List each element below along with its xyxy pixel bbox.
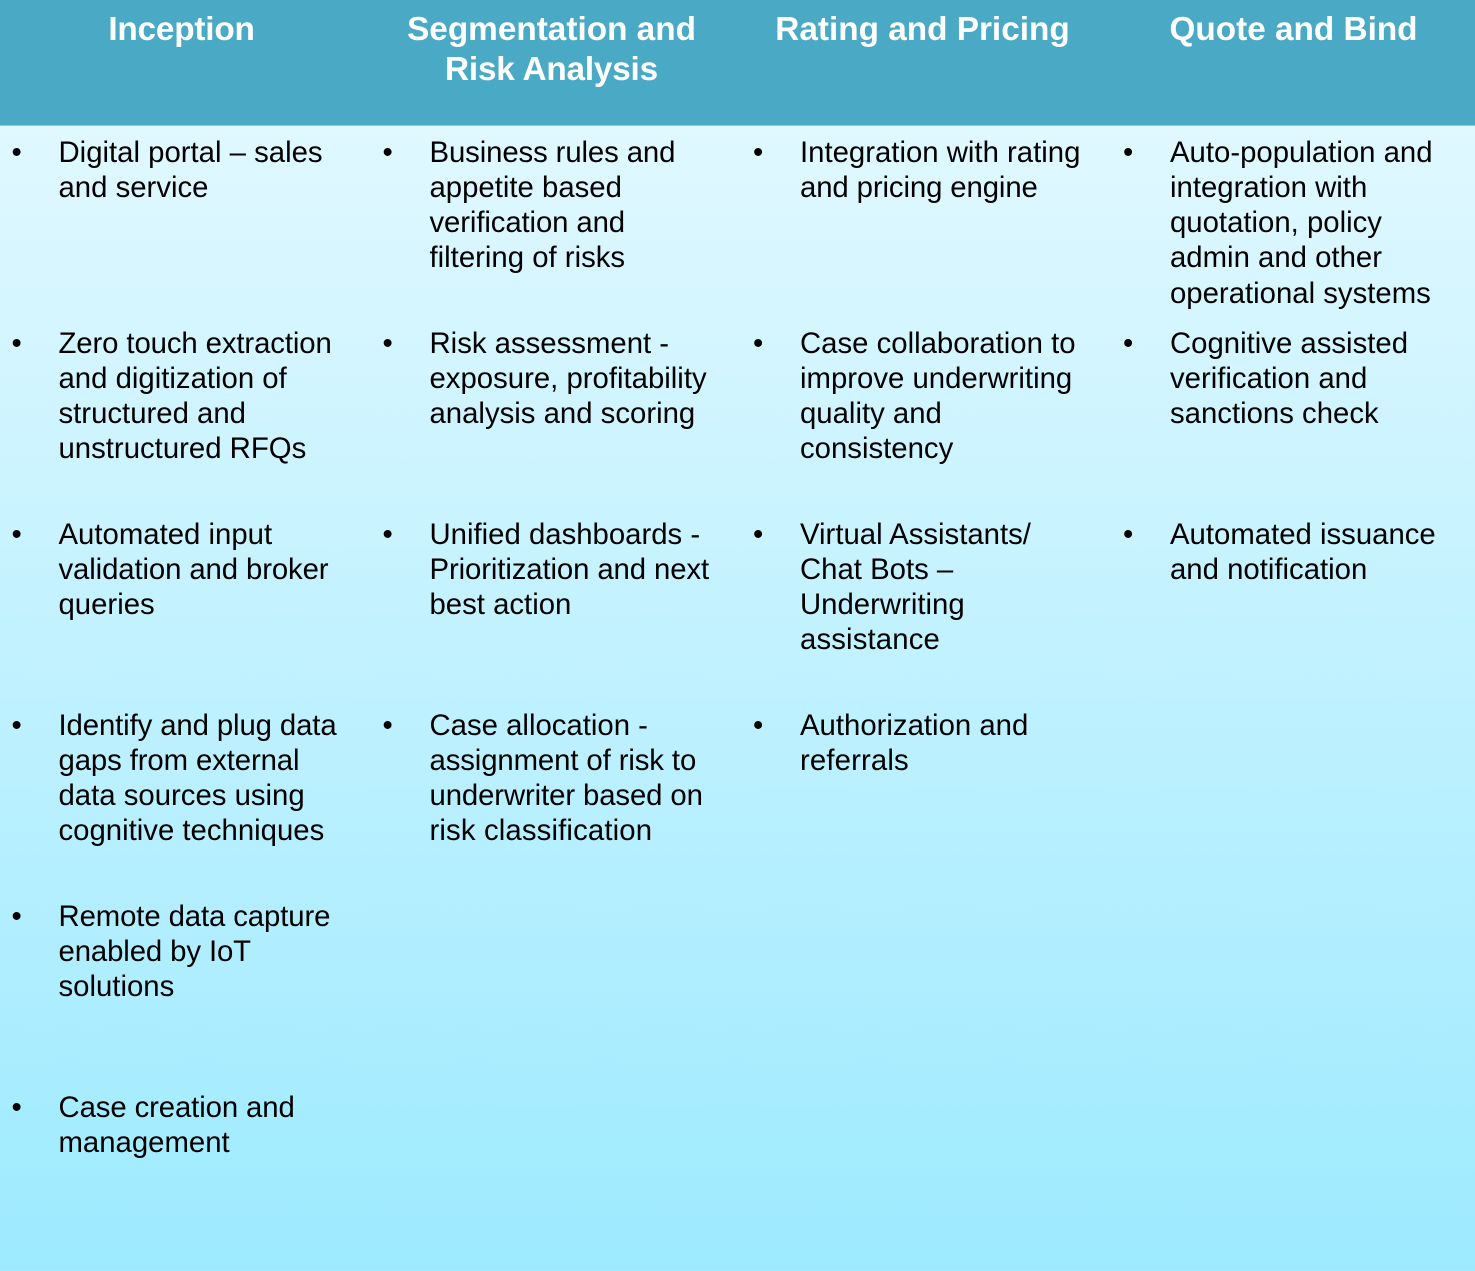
bullet: automated issuance: and notification (1170, 553, 1367, 586)
bullet: unified dashboards: best action (430, 588, 571, 621)
header band (0, 0, 1475, 126)
heading: Quote and Bind: Quote and Bind (1169, 11, 1418, 48)
bullet: identify and plug data gaps: Identify and plug data (58, 708, 337, 742)
bullet: case creation: Case creation and (58, 1090, 295, 1124)
bullet: business rules: appetite based (430, 171, 622, 204)
bullet: digital portal: and service (58, 171, 208, 204)
bullet: auto-population: • (1123, 136, 1133, 168)
bullet: virtual assistants: Virtual Assistants/ (800, 518, 1031, 550)
bullet: risk assessment: analysis and scoring (430, 397, 695, 430)
bullet: case allocation: assignment of risk to (430, 744, 696, 777)
bullet: zero touch extraction: structured and (58, 397, 246, 430)
bullet: authorization: referrals (800, 744, 909, 777)
bullet: rating engine integration (753, 136, 1080, 204)
bullet: business rules: verification and (430, 206, 625, 239)
bullet: auto-population: quotation, policy (1170, 206, 1382, 239)
bullet: identify and plug data gaps: • (12, 708, 22, 742)
bullet: virtual assistants (753, 518, 1031, 656)
column: Rating and Pricing (753, 136, 1080, 777)
bullet: case collaboration (753, 326, 1076, 465)
bullet: remote data capture: enabled by IoT (58, 935, 251, 968)
bullet: business rules: Business rules and (430, 136, 675, 168)
bullet: remote data capture: solutions (58, 970, 174, 1003)
bullet: case allocation: Case allocation - (430, 708, 648, 742)
bullet: auto-population: admin and other (1170, 241, 1382, 274)
bullet: case collaboration: improve underwriting (800, 362, 1072, 395)
bullet: case collaboration: Case collaboration to (800, 326, 1076, 360)
bullet: business rules: • (382, 136, 393, 168)
heading: Segmentation and Risk Analysis: Segmentation and (407, 11, 696, 48)
heading: Inception: Inception (108, 11, 255, 48)
column: Quote and Bind (1123, 136, 1436, 586)
bullet: unified dashboards: Unified dashboards - (430, 518, 700, 550)
heading: Segmentation and Risk Analysis (407, 11, 696, 88)
bullet: business rules (382, 136, 675, 274)
heading: Rating and Pricing: Rating and Pricing (775, 11, 1070, 48)
bullet: automated issuance: • (1123, 518, 1133, 550)
bullet: authorization: • (753, 708, 763, 742)
bullet: identify and plug data gaps: data sources using (58, 779, 305, 812)
bullet: case allocation: risk classification (430, 814, 652, 847)
bullet: identify and plug data gaps: cognitive techniques (58, 814, 324, 847)
bullet: risk assessment: Risk assessment - (430, 326, 669, 360)
bullet: cognitive verification (1123, 326, 1408, 430)
bullet: identify and plug data gaps (12, 708, 337, 847)
bullet: case creation: management (58, 1126, 230, 1159)
bullet: remote data capture (12, 900, 330, 1003)
bullet: zero touch extraction: Zero touch extraction (58, 326, 332, 360)
bullet: case allocation: underwriter based on (430, 779, 703, 812)
bullet: cognitive verification: verification and (1170, 362, 1367, 395)
bullet: cognitive verification: sanctions check (1170, 397, 1379, 430)
bullet: case collaboration: consistency (800, 432, 953, 465)
bullet: remote data capture: Remote data capture (58, 900, 330, 932)
bullet: identify and plug data gaps: gaps from external (58, 744, 299, 777)
bullet: case allocation (382, 708, 703, 847)
bullet: automated input validation: validation and broker (58, 553, 328, 586)
bullet: case collaboration: quality and (800, 397, 942, 430)
bullet: case collaboration: • (753, 326, 763, 360)
bullet: zero touch extraction: and digitization of (58, 362, 287, 395)
bullet: unified dashboards (382, 518, 709, 621)
bullet: digital portal: • (12, 136, 22, 168)
bullet: zero touch extraction: • (12, 326, 22, 360)
column: Inception (12, 136, 337, 1159)
bullet: authorization (753, 708, 1028, 777)
bullet: case creation (12, 1090, 295, 1159)
bullet: unified dashboards: • (382, 518, 393, 550)
heading: Segmentation and Risk Analysis: Risk Analysis (445, 51, 658, 88)
bullet: automated input validation: • (12, 518, 22, 550)
bullet: automated input validation (12, 518, 328, 621)
bullet: remote data capture: • (12, 900, 22, 932)
bullet: automated input validation: Automated input (58, 518, 272, 550)
bullet: cognitive verification: Cognitive assisted (1170, 326, 1408, 360)
bullet: zero touch extraction (12, 326, 332, 465)
bullet: digital portal: Digital portal – sales (58, 136, 323, 168)
bullet: rating engine integration: Integration with rating (800, 136, 1080, 168)
bullet: automated issuance (1123, 518, 1436, 586)
bullet: virtual assistants: • (753, 518, 763, 550)
bullet: risk assessment: • (382, 326, 393, 360)
bullet: risk assessment (382, 326, 707, 430)
bullet: automated input validation: queries (58, 588, 155, 621)
bullet: digital portal (12, 136, 323, 204)
bullet: virtual assistants: Chat Bots – (800, 553, 953, 586)
bullet: risk assessment: exposure, profitability (430, 362, 707, 395)
bullet: auto-population: integration with (1170, 171, 1367, 204)
bullet: auto-population: Auto-population and (1170, 136, 1433, 168)
bullet: authorization: Authorization and (800, 708, 1028, 742)
bullet: cognitive verification: • (1123, 326, 1133, 360)
bullet: rating engine integration: • (753, 136, 763, 168)
bullet: unified dashboards: Prioritization and next (430, 553, 709, 586)
bullet: zero touch extraction: unstructured RFQs (58, 432, 306, 465)
bullet: virtual assistants: assistance (800, 623, 940, 656)
bullet: automated issuance: Automated issuance (1170, 518, 1436, 550)
bullet: auto-population (1123, 136, 1433, 310)
bullet: virtual assistants: Underwriting (800, 588, 965, 621)
bullet: auto-population: operational systems (1170, 277, 1431, 310)
bullet: case allocation: • (382, 708, 393, 742)
column: Segmentation and Risk Analysis (382, 136, 709, 847)
bullet: business rules: filtering of risks (430, 241, 625, 274)
bullet: case creation: • (12, 1090, 22, 1124)
bullet: rating engine integration: and pricing engine (800, 171, 1038, 204)
